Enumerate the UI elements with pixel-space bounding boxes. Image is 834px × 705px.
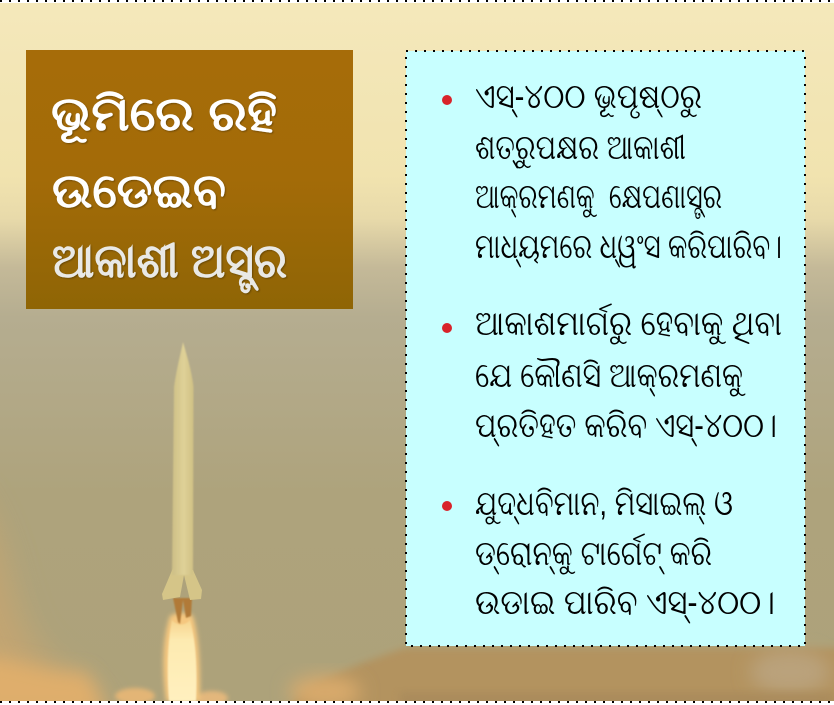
bottom dotted border (0, 701, 834, 705)
title line 3: ଆକାଶୀ ଅସ୍ତ୍ର (52, 235, 287, 293)
bullet point 2: ଯେ କୌଣସି ଆକ୍ରମଣକୁ (475, 356, 746, 398)
title line 1: ଭୂମିରେ ରହି (51, 88, 277, 143)
rocket exhaust flame (163, 613, 200, 701)
bullet point 3 (442, 484, 775, 624)
bullet point 3: ଡ୍ରୋନ୍‌କୁ ଟାର୍ଗେଟ୍ କରି (475, 533, 712, 576)
bullet point 2: ଆକାଶମାର୍ଗରୁ ହେବାକୁ ଥିବା (475, 303, 782, 346)
smoke clouds (0, 480, 834, 705)
title box (26, 50, 353, 309)
bullet point 1: ଏସ୍-୪୦୦ ଭୂପୃଷ୍ଠରୁ (475, 77, 702, 119)
title line 2: ଉଡେଇବ (52, 165, 226, 218)
rocket fins (162, 568, 202, 600)
top dotted border (0, 0, 834, 3)
bullet point 3: ଯୁଦ୍ଧବିମାନ, ମିସାଇଲ୍ ଓ (475, 484, 733, 526)
bullet point 1 (442, 77, 782, 268)
rocket (162, 342, 202, 624)
rocket body (172, 342, 194, 575)
rocket nozzles (173, 598, 192, 624)
panel: key points (406, 51, 805, 646)
bullet point 1: ଶତ୍ରୁପକ୍ଷର ଆକାଶୀ (475, 128, 686, 170)
bullet point 3: ଉଡାଇ ପାରିବ ଏସ୍-୪୦୦। (475, 583, 775, 624)
bullet point 2 (442, 303, 782, 447)
bullet point 1: ଆକ୍ରମଣକୁ କ୍ଷେପଣାସ୍ତ୍ର (475, 177, 722, 220)
bullet point 2: ପ୍ରତିହତ କରିବ ଏସ୍-୪୦୦। (475, 406, 777, 447)
